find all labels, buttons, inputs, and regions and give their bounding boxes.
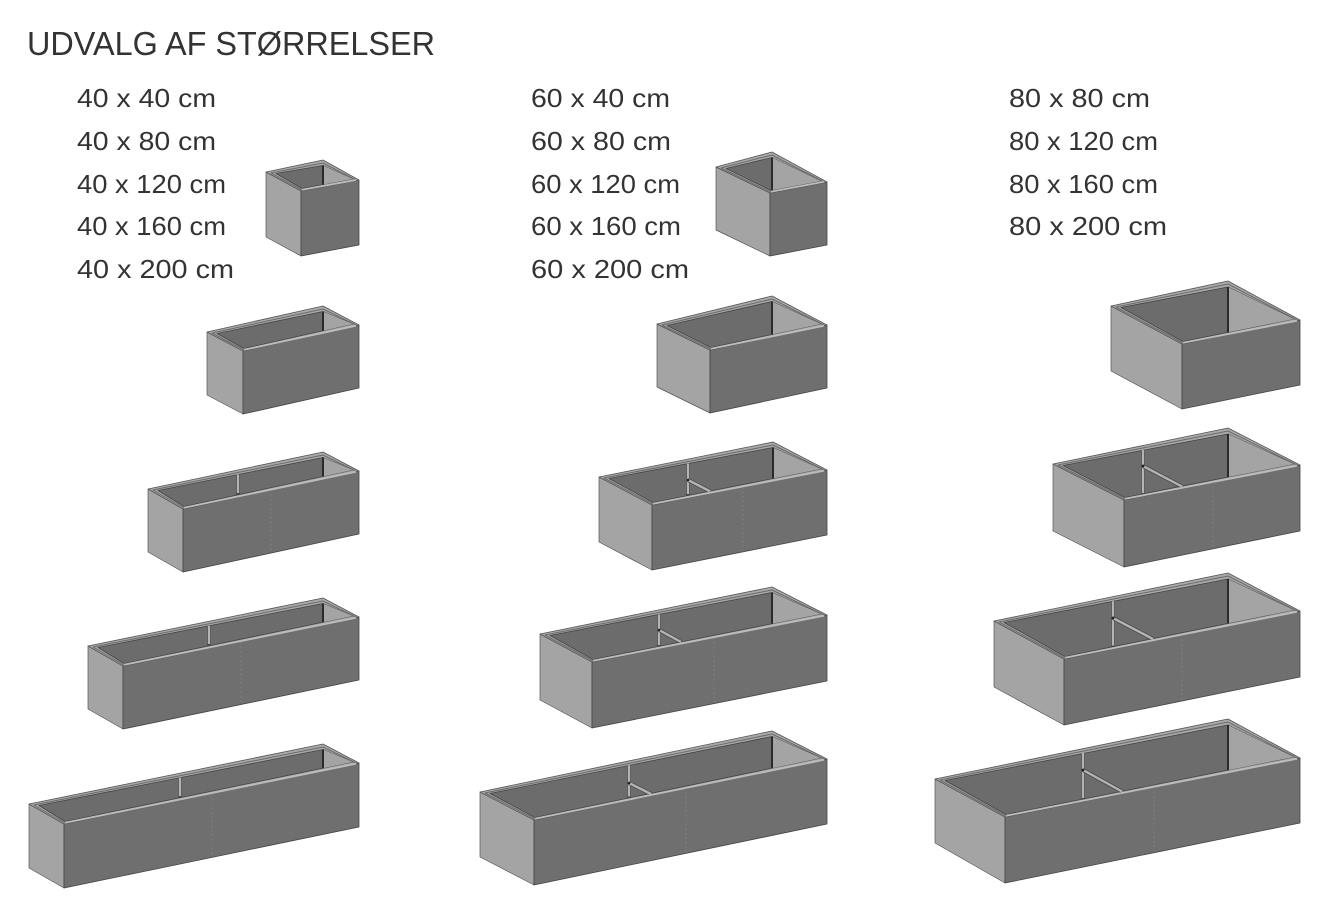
size list: 40 cm: 40 x 200 cm — [77, 254, 234, 284]
size list: 60 cm — [531, 83, 689, 284]
size list: 80 cm — [1009, 83, 1167, 241]
planter box: 60 x 160 cm — [540, 587, 827, 728]
panel: 60 cm column — [480, 83, 827, 885]
size list: 60 cm: 60 x 120 cm — [531, 169, 680, 199]
planter box: 40 x 80 cm — [207, 306, 359, 414]
size list: 40 cm: 40 x 40 cm — [77, 83, 216, 113]
planter box: 40 x 120 cm — [148, 452, 359, 572]
planter box: 80 x 120 cm — [1053, 428, 1300, 567]
size list: 60 cm: 60 x 200 cm — [531, 254, 689, 284]
planter box: 60 x 80 cm — [657, 296, 827, 413]
planter box: 60 x 200 cm — [480, 731, 827, 885]
size list: 60 cm: 60 x 160 cm — [531, 211, 681, 241]
planter box: 60 x 120 cm — [599, 442, 827, 570]
size list: 40 cm: 40 x 80 cm — [77, 126, 216, 156]
planter box: 80 x 80 cm — [1111, 281, 1300, 409]
planter box: 80 x 160 cm — [994, 573, 1300, 725]
panel: 40 cm column — [29, 83, 359, 888]
size list: 60 cm: 60 x 40 cm — [531, 83, 670, 113]
size list: 80 cm: 80 x 80 cm — [1009, 83, 1150, 113]
planter box: 40 x 160 cm — [88, 598, 359, 729]
size list: 40 cm: 40 x 120 cm — [77, 169, 226, 199]
size list: 80 cm: 80 x 120 cm — [1009, 126, 1158, 156]
title: UDVALG AF STØRRELSER — [27, 25, 435, 62]
planter box: 40 x 200 cm — [29, 744, 359, 888]
size list: 80 cm: 80 x 200 cm — [1009, 211, 1167, 241]
size list: 60 cm: 60 x 80 cm — [531, 126, 671, 156]
size list: 40 cm — [77, 83, 234, 284]
planter box: 40 x 40 cm — [266, 160, 359, 256]
planter box: 80 x 200 cm — [935, 719, 1300, 883]
size list: 80 cm: 80 x 160 cm — [1009, 169, 1158, 199]
planter box: 60 x 40 cm — [716, 152, 827, 256]
panel: 80 cm column — [935, 83, 1300, 883]
size list: 40 cm: 40 x 160 cm — [77, 211, 226, 241]
